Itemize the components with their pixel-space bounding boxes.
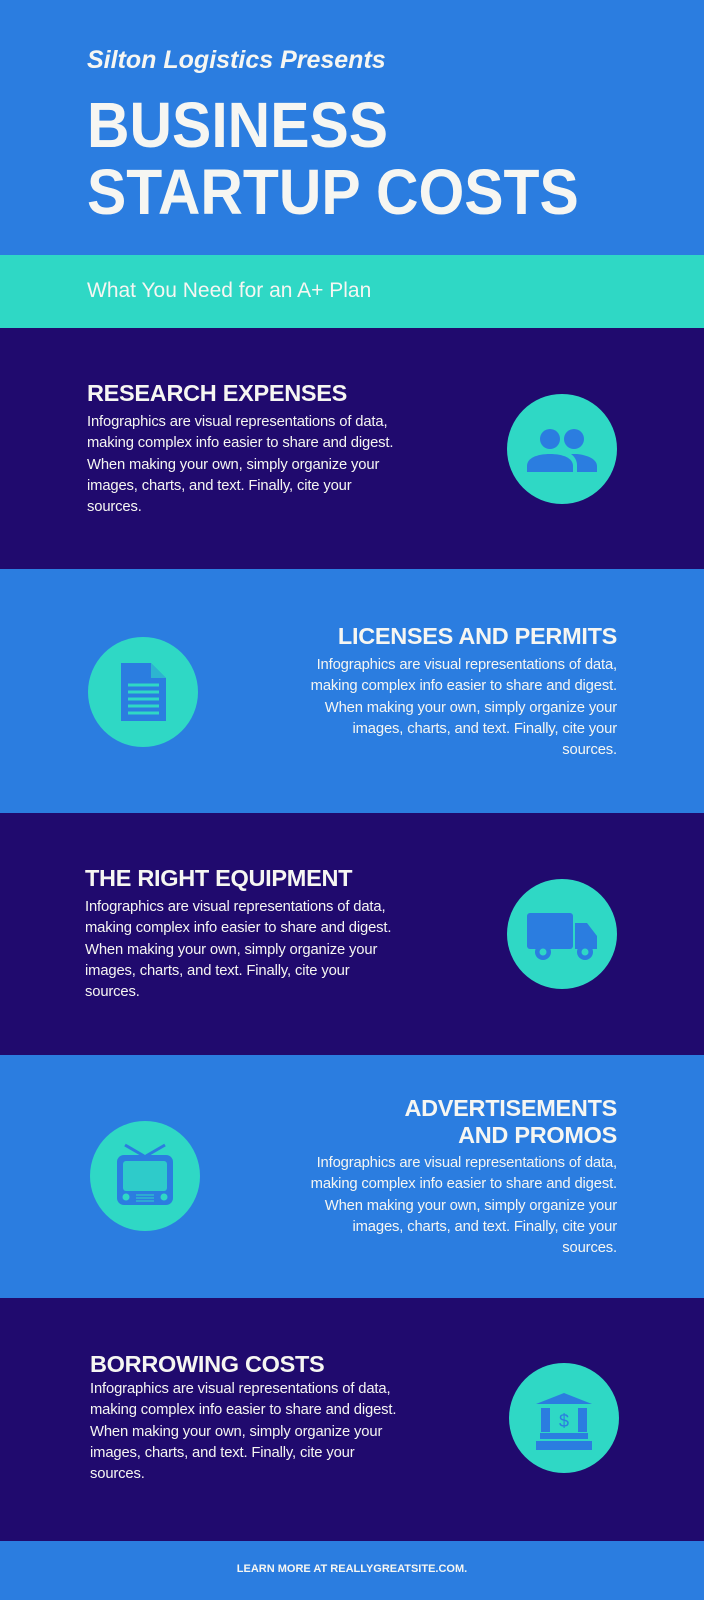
- icon: document: [88, 637, 198, 747]
- title: BUSINESS: [87, 89, 388, 161]
- text block: making complex info easier to share and digest.: [311, 678, 617, 694]
- text block: making complex info easier to share and digest.: [311, 1176, 617, 1192]
- text block: When making your own, simply organize your: [85, 942, 377, 958]
- text block: images, charts, and text. Finally, cite your: [85, 963, 350, 979]
- text block: Infographics are visual representations of data,: [85, 899, 385, 915]
- panel: research expenses: [0, 328, 704, 569]
- text block: images, charts, and text. Finally, cite your: [87, 478, 352, 494]
- text block: When making your own, simply organize your: [325, 1198, 617, 1214]
- text block: sources.: [90, 1466, 145, 1482]
- text block: making complex info easier to share and digest.: [90, 1402, 396, 1418]
- text block: sources.: [562, 1240, 617, 1256]
- icon: people: [507, 394, 617, 504]
- text block: making complex info easier to share and digest.: [85, 920, 391, 936]
- heading: [404, 1095, 617, 1148]
- panel: advertisements and promos: [0, 1055, 704, 1298]
- text block: Infographics are visual representations of data,: [90, 1381, 390, 1397]
- text block: When making your own, simply organize your: [90, 1424, 382, 1440]
- footer: [0, 1541, 704, 1600]
- text block: images, charts, and text. Finally, cite your: [352, 721, 617, 737]
- text block: sources.: [562, 742, 617, 758]
- heading: ADVERTISEMENTS: [404, 1095, 617, 1121]
- title: STARTUP COSTS: [87, 156, 579, 228]
- text block: Infographics are visual representations of data,: [87, 414, 387, 430]
- panel: borrowing costs: [0, 1298, 704, 1541]
- icon: bank: $: [559, 1411, 569, 1431]
- header: [0, 0, 704, 255]
- icon: tv: [90, 1121, 200, 1231]
- text block: When making your own, simply organize your: [87, 457, 379, 473]
- panel: licenses and permits: [0, 569, 704, 813]
- text block: [85, 899, 391, 1000]
- panel: right equipment: [0, 813, 704, 1055]
- text block: Infographics are visual representations of data,: [317, 1155, 617, 1171]
- text block: images, charts, and text. Finally, cite your: [90, 1445, 355, 1461]
- text block: sources.: [87, 499, 142, 515]
- presenter line: Silton Logistics Presents: [87, 46, 386, 74]
- heading: BORROWING COSTS: [90, 1351, 324, 1377]
- text block: images, charts, and text. Finally, cite your: [352, 1219, 617, 1235]
- footer text: LEARN MORE AT REALLYGREATSITE.COM.: [237, 1563, 467, 1575]
- text block: [90, 1381, 396, 1482]
- text block: [87, 414, 393, 515]
- heading: LICENSES AND PERMITS: [338, 623, 617, 649]
- text block: [311, 1155, 617, 1256]
- subtitle band: [0, 255, 704, 328]
- heading: RESEARCH EXPENSES: [87, 380, 347, 406]
- text block: [311, 657, 617, 758]
- icon: truck: [507, 879, 617, 989]
- text block: When making your own, simply organize your: [325, 700, 617, 716]
- subtitle: What You Need for an A+ Plan: [87, 279, 371, 302]
- heading: THE RIGHT EQUIPMENT: [85, 865, 352, 891]
- heading: AND PROMOS: [458, 1122, 617, 1148]
- text block: making complex info easier to share and digest.: [87, 435, 393, 451]
- title: [87, 89, 579, 228]
- icon: bank: [509, 1363, 619, 1473]
- text block: Infographics are visual representations of data,: [317, 657, 617, 673]
- text block: sources.: [85, 984, 140, 1000]
